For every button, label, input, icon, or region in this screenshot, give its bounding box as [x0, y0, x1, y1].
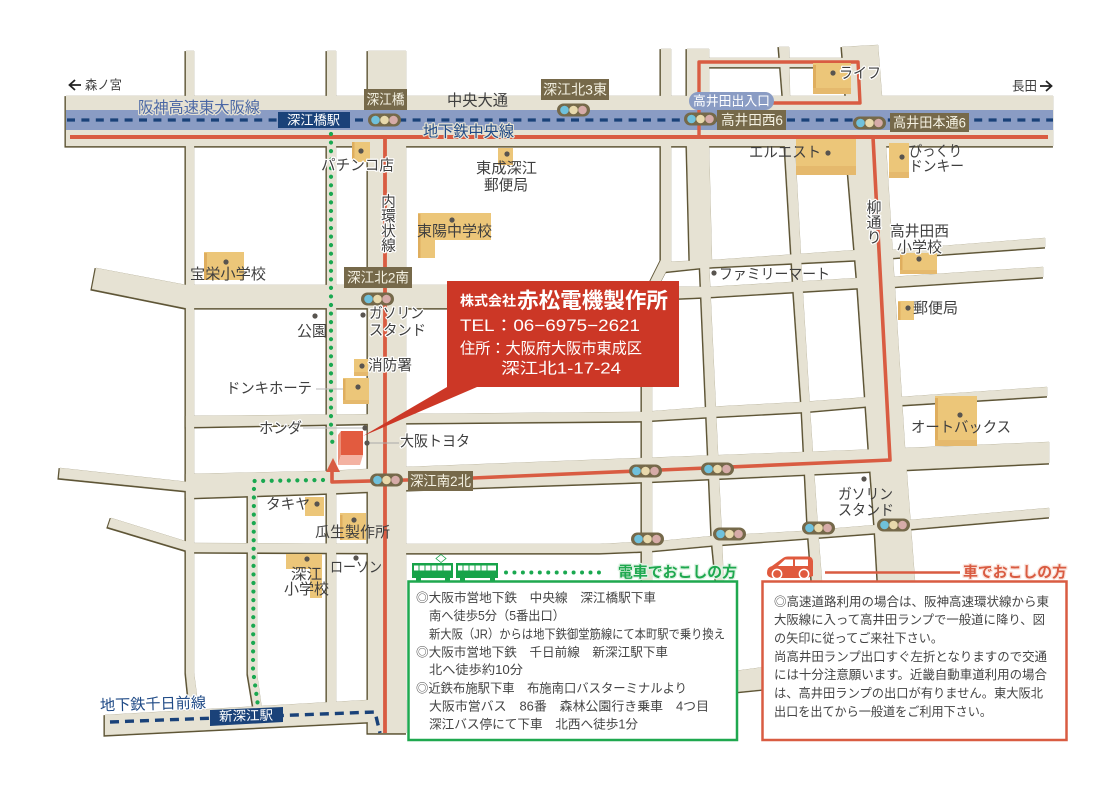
panel: by car directions: ◎高速道路利用の場合は、阪神高速環状線から東: [774, 594, 1049, 609]
icon: car: [767, 556, 813, 579]
road label: inner ring line: 内環状線: [379, 193, 395, 253]
poi: Bikkuri Donkey: びっくり: [909, 143, 962, 160]
traffic light: [877, 518, 910, 532]
junction label: Fukae-minami 2 kita: 深江南2北: [410, 473, 471, 489]
poi: Bikkuri Donkey: [889, 143, 964, 178]
panel: by car directions: 尚高井田ランプ出口すぐ左折となりますので交通: [774, 649, 1047, 664]
traffic light: [631, 532, 664, 546]
traffic light: [853, 116, 886, 130]
dotted leader: train heading: [506, 570, 606, 574]
station label: Shin-Fukae: [210, 707, 283, 726]
poi: Osaka Toyota: 大阪トヨタ: [400, 433, 470, 450]
panel: by car directions: は、高井田ランプの出口が有りません。東大阪北: [774, 686, 1043, 700]
junction label: Fukaebashi: [364, 89, 407, 110]
callout: company info: 住所：大阪府大阪市東成区: [460, 340, 642, 358]
junction label: Takaida-hondori 6: 高井田本通6: [893, 114, 966, 130]
junction label: Fukaebashi: 深江橋: [366, 92, 404, 108]
poi: Higashinari Fukae post office: 郵便局: [484, 177, 528, 194]
panel: by train directions: ◎大阪市営地下鉄 千日前線 新深江駅下車: [416, 644, 668, 660]
panel: by train directions: ◎大阪市営地下鉄 中央線 深江橋駅下車: [416, 590, 656, 605]
junction label: Fukae-kita 3 higashi: 深江北3東: [543, 82, 607, 98]
traffic light: [370, 474, 403, 486]
traffic light: [557, 104, 590, 116]
poi: L-Quest: [749, 139, 856, 175]
panel: by car directions: [762, 582, 1066, 740]
red road: inner ring route: [383, 137, 387, 733]
heading: by train: 電車でおこしの方: [618, 563, 737, 581]
direction label: Morinomiya: 森ノ宮: [85, 78, 122, 92]
green walking route from Fukaebashi: [331, 134, 333, 448]
traffic light: [684, 112, 717, 126]
dashed subway line: Sennichimae line: [110, 712, 380, 733]
panel: by train directions: 大阪市営バス 86番 森林公園行き乗車 4つ目: [429, 700, 709, 714]
poi: gas station east: [838, 476, 894, 519]
poi: Higashinari Fukae post office: [476, 148, 537, 194]
panel: by train directions: 南へ徒歩5分（5番出口）: [429, 608, 565, 623]
station label: Shin-Fukae: 新深江駅: [219, 708, 273, 724]
poi: park: 公園: [297, 323, 327, 340]
poi: gas station: スタンド: [369, 322, 426, 339]
road label: Yanagi-dori: 柳通り: [864, 200, 882, 245]
poi: Osaka Toyota: [364, 433, 470, 450]
heading: by car: 車でおこしの方: [963, 563, 1067, 581]
poi: Lawson: ローソン: [330, 560, 382, 576]
arrow: route arrowhead: [326, 458, 340, 472]
poi: post office east: 郵便局: [913, 300, 958, 317]
green walking route from Shin-Fukae: [253, 480, 323, 706]
poi: Takaida-nishi elementary: 小学校: [897, 239, 942, 256]
poi: gas station: ガソリン: [369, 305, 424, 322]
station label: Fukaebashi: [278, 112, 350, 128]
traffic light: [701, 462, 734, 476]
direction label: Nagata: 長田: [1012, 78, 1037, 94]
callout: company info: [447, 281, 679, 387]
panel: by train directions: ◎近鉄布施駅下車 布施南口バスターミナルより: [416, 680, 687, 696]
poi: Honda: ホンダ: [259, 420, 302, 437]
poi: post office east: [898, 300, 958, 320]
panel: by train directions: 北へ徒歩約10分: [429, 663, 523, 677]
poi: Autobacs: [911, 396, 1011, 446]
direction label: Nagata: [1012, 78, 1052, 94]
poi: Fukae elementary: 深江: [291, 566, 322, 583]
panel: by car directions: 出口を出てから一般道をご利用下さい。: [774, 704, 992, 719]
poi: Higashinari Fukae post office: 東成深江: [476, 160, 537, 177]
traffic light: [361, 292, 394, 306]
red car route: Takaida ramp loop: [699, 62, 860, 137]
label: expressway name: 阪神高速東大阪線: [138, 100, 260, 116]
poi: gas station east: スタンド: [838, 502, 894, 519]
panel: by train directions: [408, 582, 737, 740]
traffic light: [802, 522, 835, 534]
poi: Takiya: [266, 496, 324, 516]
callout: company info: TEL：06−6975−2621: [460, 317, 640, 335]
icon: train: [412, 554, 498, 580]
poi: Uryu works: [315, 513, 390, 541]
poi: L-Quest: エルエスト: [749, 145, 821, 161]
junction label: Fukae-kita 2 minami: 深江北2南: [347, 270, 409, 286]
poi: Toyo junior high: 東陽中学校: [417, 223, 492, 240]
junction label: Takaida-nishi 6: 高井田西6: [721, 112, 783, 128]
ramp label: Takaida exit: 高井田出入口: [693, 94, 770, 108]
road label: Chuo-odori: 中央大通: [447, 92, 508, 110]
poi: Takaida-nishi elementary: 高井田西: [890, 223, 949, 240]
poi: Autobacs: オートバックス: [911, 419, 1011, 436]
callout: company info: 株式会社: [460, 292, 517, 308]
label: Sennichimae subway: 地下鉄千日前線: [100, 695, 206, 714]
poi: Don Quijote: [226, 378, 369, 404]
callout: company info: 深江北1-17-24: [501, 360, 621, 378]
expressway band: Hanshin Higashi-Osaka line: [66, 110, 1053, 130]
poi: fire station: 消防署: [368, 357, 412, 374]
callout: company info: 赤松電機製作所: [517, 289, 668, 313]
poi: Uryu works: 瓜生製作所: [315, 524, 390, 541]
poi: fire station: [354, 357, 412, 376]
road network: [58, 45, 1053, 736]
poi: Honda: [259, 420, 368, 437]
red road: Chuo-odori route: [70, 135, 1048, 139]
poi: Toyo junior high: [417, 213, 492, 258]
poi: pachinko: [321, 142, 394, 174]
direction label: Morinomiya: [70, 78, 122, 92]
poi: Don Quijote: ドンキホーテ: [226, 381, 312, 397]
poi: Takaida-nishi elementary: [890, 223, 949, 274]
poi: Life supermarket: ライフ: [839, 66, 881, 82]
poi: Takiya: タキヤ: [266, 496, 310, 513]
panel: by car directions: の矢印に従ってご来社下さい。: [774, 630, 943, 646]
label: subway Chuo line: 地下鉄中央線: [423, 124, 514, 140]
station label: Fukaebashi: 深江橋駅: [287, 112, 340, 128]
poi: Fukae elementary: 小学校: [284, 581, 329, 598]
panel: by car directions: 大阪線に入って高井田ランプで一般道に降り、図: [774, 612, 1045, 627]
leader line: car heading: [825, 571, 960, 574]
poi: park: [297, 313, 327, 340]
traffic light: [713, 528, 746, 540]
poi: Hoei elementary: 宝栄小学校: [190, 266, 266, 283]
poi: Bikkuri Donkey: ドンキー: [909, 159, 964, 175]
poi: Hoei elementary: [190, 252, 266, 283]
poi: FamilyMart: ファミリーマート: [719, 267, 830, 283]
red car route: Yanagi-dori to destination: [332, 137, 890, 482]
panel: by train directions: 新大阪（JR）からは地下鉄御堂筋線にて本町駅で乗り換え: [429, 626, 725, 642]
poi: pachinko: パチンコ店: [321, 157, 394, 174]
traffic light: [368, 114, 401, 126]
poi: Life supermarket: [813, 63, 881, 94]
poi: gas station: [360, 305, 426, 339]
poi: Fukae elementary: [284, 554, 329, 598]
traffic light: [629, 464, 662, 478]
subway dashed line: Chuo line: [67, 118, 1053, 122]
panel: by train directions: 深江バス停にて下車 北西へ徒歩1分: [429, 718, 638, 732]
poi: gas station east: ガソリン: [838, 486, 893, 503]
callout pointer: [363, 387, 477, 436]
destination building: [338, 431, 363, 465]
panel: by car directions: には十分注意願います。近畿自動車道利用の場合: [774, 668, 1047, 682]
